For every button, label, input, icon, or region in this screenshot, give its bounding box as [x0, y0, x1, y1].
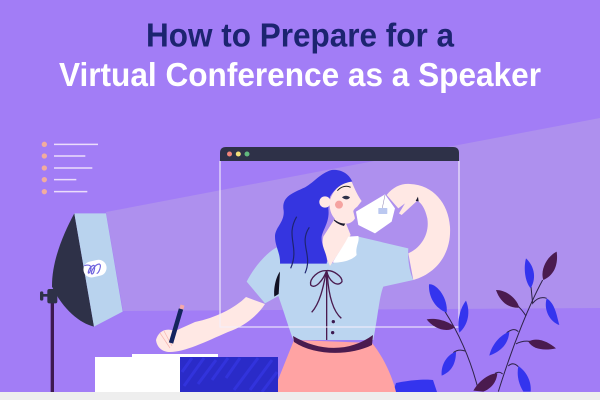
- bullet list decoration: [42, 142, 98, 194]
- belt: [293, 335, 373, 353]
- pencil: [171, 305, 184, 343]
- browser window frame: [220, 147, 459, 327]
- plant: [427, 252, 559, 392]
- bottom strip: [0, 392, 600, 400]
- title: Virtual Conference as a Speaker: [59, 56, 541, 93]
- neck: [323, 218, 351, 266]
- bow: [311, 271, 342, 340]
- writing arm: [156, 297, 265, 352]
- back arm with cup hand: [387, 184, 450, 280]
- hair: [275, 170, 352, 264]
- woman: [156, 170, 450, 392]
- softbox studio light: [40, 213, 123, 392]
- desk books: [95, 354, 278, 392]
- face: [330, 182, 362, 224]
- light beam: [106, 118, 600, 311]
- shirt: [247, 237, 413, 340]
- blue chair: [393, 380, 437, 392]
- collar: [333, 236, 359, 263]
- hair strands: [291, 217, 309, 273]
- underarm shadow: [274, 272, 280, 297]
- title: How to Prepare for a: [146, 16, 455, 54]
- tea cup: [356, 194, 395, 233]
- title: [59, 16, 541, 93]
- skirt: [278, 340, 396, 392]
